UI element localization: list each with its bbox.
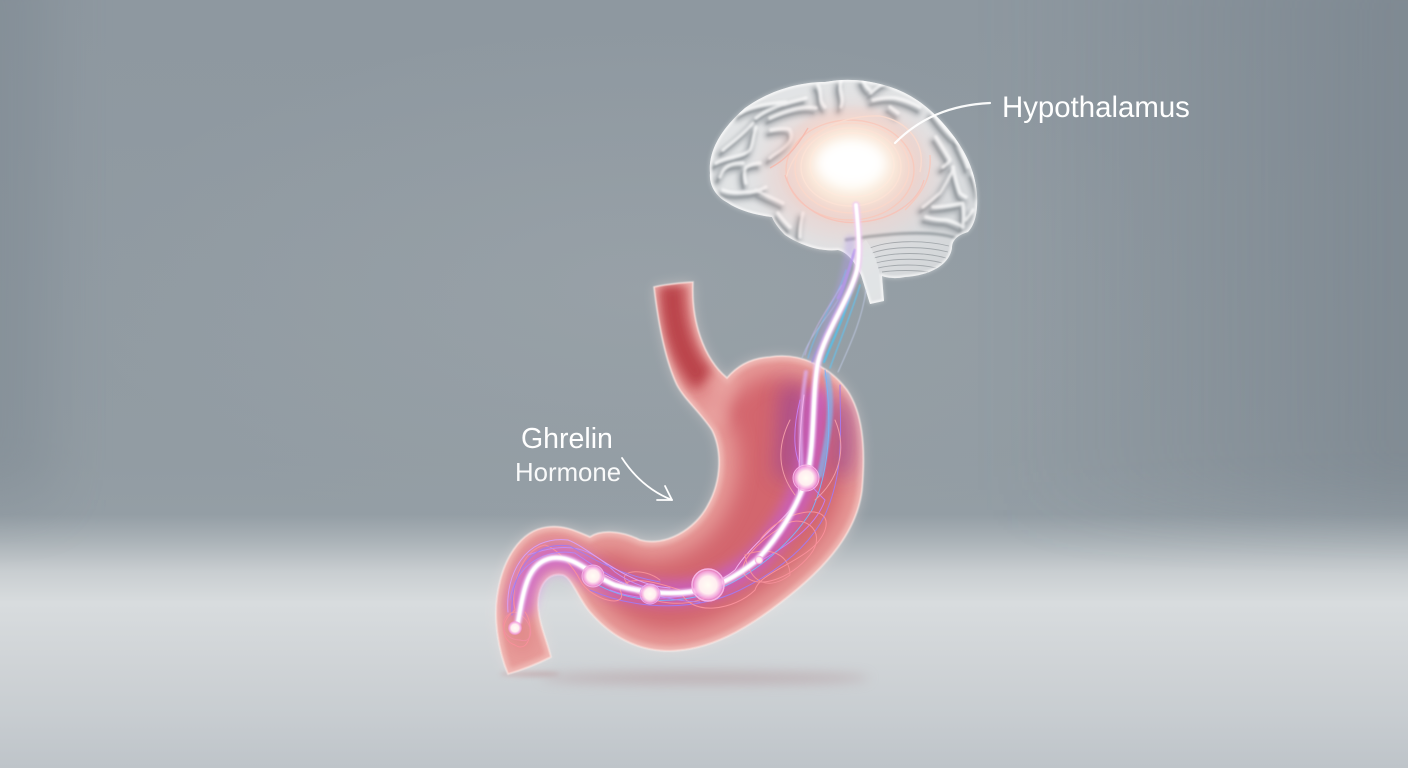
brain <box>708 78 980 306</box>
hypothalamus glow <box>765 104 935 238</box>
node 6 <box>754 556 764 564</box>
nerve pathway <box>503 205 866 647</box>
label: Hypothalamus: Hypothalamus <box>1002 91 1190 124</box>
node 2 <box>692 569 724 601</box>
cerebral folds <box>713 85 977 242</box>
floor shadow <box>500 671 870 684</box>
hypothalamus leader line <box>895 103 990 143</box>
node 3 <box>640 584 660 604</box>
node 1 <box>793 465 819 491</box>
cerebellum <box>845 233 956 272</box>
arrow: ghrelin to stomach <box>622 458 672 500</box>
node 4 <box>582 565 604 587</box>
stomach fibre halo <box>520 400 816 605</box>
label: Ghrelin: Ghrelin <box>521 423 613 455</box>
ghrelin signal nodes <box>508 465 819 635</box>
stomach rim highlight <box>496 282 863 674</box>
node 5 <box>508 621 522 635</box>
label: Hormone: Hormone <box>515 459 621 487</box>
stomach and esophagus <box>494 278 868 676</box>
